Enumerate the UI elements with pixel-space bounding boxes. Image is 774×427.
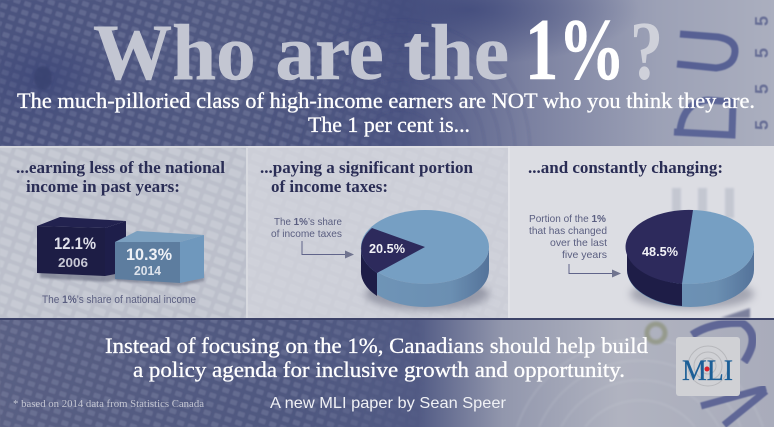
footer background banknote texture bbox=[0, 318, 774, 427]
bar: 2014 blue block: 2014 bbox=[134, 264, 161, 278]
panel: paying taxes bbox=[246, 146, 508, 318]
arrow: to tax pie bbox=[302, 241, 354, 258]
title: Who are the bbox=[93, 10, 509, 97]
label: portion changed bbox=[529, 213, 607, 261]
panel: earning less bbox=[0, 146, 246, 318]
banknote letters D U and digits at right of header: 5 bbox=[752, 16, 772, 26]
header background banknote texture bbox=[0, 0, 774, 146]
bar: 2006 dark block bbox=[37, 217, 128, 282]
byline: A new MLI paper by Sean Speer bbox=[270, 395, 507, 412]
bar: 2006 dark block: 2006 bbox=[58, 256, 88, 270]
heading: paying taxes: of income taxes: bbox=[271, 177, 388, 196]
label: share of income taxes: The 1%’s share bbox=[274, 216, 342, 228]
logo: MLI: MLI bbox=[682, 354, 733, 387]
label: portion changed: Portion of the 1% bbox=[529, 213, 607, 225]
pie chart: 48.5 percent bbox=[626, 210, 754, 309]
subtitle bbox=[17, 88, 755, 137]
banknote letters D U and digits at right of header: 5 bbox=[752, 120, 772, 130]
heading: constantly changing: ...and constantly changing: bbox=[528, 158, 723, 177]
heading: earning less: ...earning less of the national bbox=[16, 158, 225, 177]
subtitle: The 1 per cent is... bbox=[308, 112, 470, 137]
footnote: * based on 2014 data from Statistics Canada bbox=[13, 399, 205, 410]
pie chart: 20.5 percent bbox=[361, 210, 489, 310]
label: share of income taxes: of income taxes bbox=[271, 228, 342, 240]
closing message bbox=[105, 333, 648, 382]
banknote letters D U and digits at right of header: 5 bbox=[752, 48, 772, 58]
banknote letters D U and digits at right of header bbox=[674, 16, 772, 135]
title bbox=[93, 2, 663, 99]
pie chart: 48.5 percent: 48.5% bbox=[642, 244, 678, 259]
banknote letters D U and digits at right of header: 5 bbox=[752, 84, 772, 94]
pie chart: 20.5 percent: 20.5% bbox=[369, 241, 405, 256]
panel: constantly changing bbox=[508, 146, 774, 318]
label: portion changed: five years bbox=[562, 249, 607, 261]
bar: 2014 blue block bbox=[115, 231, 204, 286]
arrow: to change pie bbox=[569, 264, 621, 278]
heading: paying taxes: ...paying a significant portion bbox=[260, 158, 473, 177]
heading: paying taxes bbox=[260, 158, 473, 196]
title: ? bbox=[630, 5, 663, 98]
subtitle: The much-pilloried class of high-income earners are NOT who you think they are. bbox=[17, 88, 755, 113]
caption: share of national income: The 1%’s share of national income bbox=[42, 294, 196, 306]
closing message: Instead of focusing on the 1%, Canadians should help build bbox=[105, 333, 648, 358]
label: portion changed: that has changed bbox=[529, 225, 607, 237]
title: 1% bbox=[525, 2, 625, 99]
label: portion changed: over the last bbox=[550, 237, 607, 249]
heading: earning less bbox=[16, 158, 225, 196]
logo: MLI bbox=[676, 337, 740, 396]
closing message: a policy agenda for inclusive growth and opportunity. bbox=[133, 357, 625, 382]
label: share of income taxes bbox=[271, 216, 342, 240]
heading: earning less: income in past years: bbox=[26, 177, 180, 196]
bar: 2006 dark block: 12.1% bbox=[54, 234, 96, 253]
bar: 2014 blue block: 10.3% bbox=[126, 245, 172, 264]
